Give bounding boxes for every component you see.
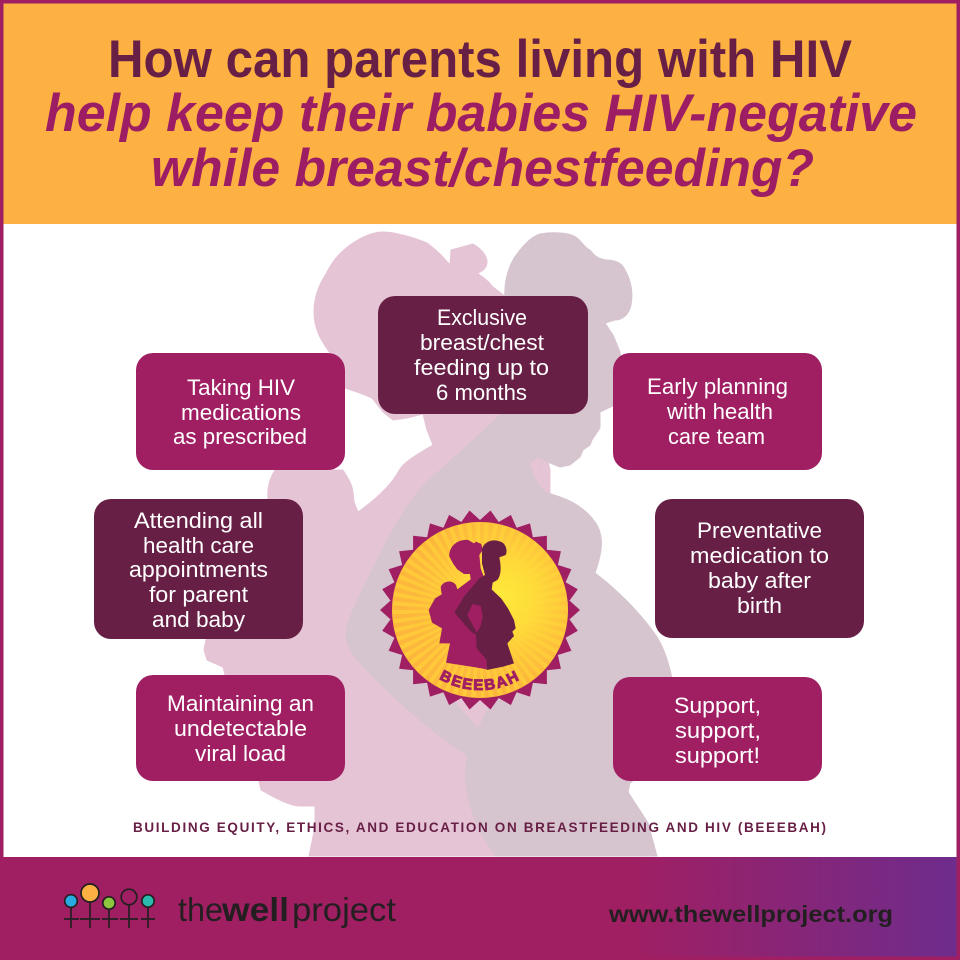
- website url: www.thewellproject.org: [608, 901, 893, 927]
- box: attending appointments: for parent: [149, 582, 248, 607]
- box: support: support,: [675, 718, 761, 743]
- box: early planning: with health: [666, 399, 773, 424]
- box: preventative medication: [655, 499, 864, 638]
- box: preventative medication: medication to: [690, 543, 829, 568]
- silhouette overlap: neck sliver: [530, 457, 545, 492]
- logo wordmark: the: [178, 891, 223, 928]
- box: attending appointments: and baby: [152, 607, 245, 632]
- box: preventative medication: birth: [737, 593, 782, 618]
- logo wordmark: project: [292, 891, 396, 928]
- box: preventative medication: Preventative: [697, 518, 822, 543]
- box: undetectable viral load: [136, 675, 345, 781]
- badge: BEEEBAH seal: [380, 510, 580, 710]
- box: undetectable viral load: viral load: [195, 741, 286, 766]
- footer band: [0, 857, 960, 960]
- silhouette overlap: arm gap: [453, 700, 492, 728]
- box: preventative medication: baby after: [708, 568, 811, 593]
- box: early planning: [613, 353, 822, 470]
- box: early planning: care team: [668, 424, 765, 449]
- box: exclusive feeding: 6 months: [436, 380, 527, 405]
- box: support: support!: [675, 743, 760, 768]
- box: attending appointments: Attending all: [134, 508, 263, 533]
- box: exclusive feeding: [378, 296, 588, 414]
- badge label: BEEEBAH: [439, 669, 520, 690]
- box: taking medications: [136, 353, 345, 470]
- box: attending appointments: health care: [143, 533, 254, 558]
- title line 1: How can parents living with HIV: [108, 30, 852, 89]
- box: attending appointments: [94, 499, 303, 639]
- badge figures: [429, 540, 516, 670]
- header banner: [0, 0, 960, 224]
- title line 2: help keep their babies HIV-negative: [45, 84, 917, 143]
- box: undetectable viral load: Maintaining an: [167, 691, 314, 716]
- title line 3: while breast/chestfeeding?: [151, 139, 814, 198]
- silhouette: pregnant parent: [346, 233, 680, 856]
- box: taking medications: medications: [181, 400, 301, 425]
- silhouette: parent carrying baby: [204, 232, 550, 856]
- box: exclusive feeding: feeding up to: [414, 355, 549, 380]
- box: taking medications: as prescribed: [173, 424, 307, 449]
- box: support: [613, 677, 822, 781]
- caption: BUILDING EQUITY, ETHICS, AND EDUCATION ON BREASTFEEDING AND HIV (BEEEBAH): [133, 820, 826, 835]
- logo wordmark: well: [221, 891, 289, 928]
- box: taking medications: Taking HIV: [187, 375, 295, 400]
- box: attending appointments: appointments: [129, 557, 268, 582]
- box: exclusive feeding: breast/chest: [420, 330, 544, 355]
- logo icon: five figures: [64, 884, 155, 928]
- box: early planning: Early planning: [647, 374, 788, 399]
- box: support: Support,: [674, 693, 761, 718]
- box: undetectable viral load: undetectable: [174, 716, 307, 741]
- logo wordmark: [178, 891, 396, 928]
- box: exclusive feeding: Exclusive: [437, 305, 527, 330]
- badge scalloped edge: [380, 510, 580, 710]
